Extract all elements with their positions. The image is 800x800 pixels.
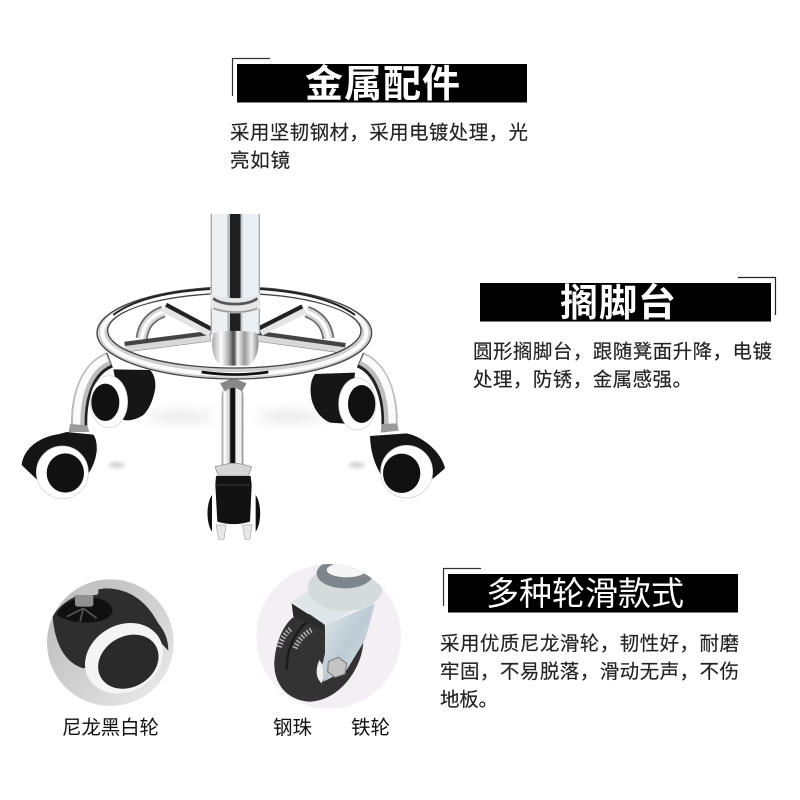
text block: metal parts description: 采用坚韧钢材，采用电镀处理，光 bbox=[230, 122, 528, 144]
text block: footrest description: 处理，防锈，金属感强。 bbox=[473, 369, 692, 391]
label: nylon wheel: 尼龙黑白轮 bbox=[62, 717, 159, 739]
text block: metal parts description: 亮如镜 bbox=[230, 150, 290, 172]
back legs bbox=[142, 312, 328, 338]
heading: metal parts bbox=[232, 58, 527, 106]
photo: nylon black and white wheel bbox=[47, 579, 176, 708]
hub bbox=[212, 331, 259, 366]
footrest ring bbox=[97, 287, 372, 379]
floor shadows bbox=[109, 411, 365, 467]
label: iron wheel: 铁轮 bbox=[351, 717, 390, 739]
front right caster bbox=[370, 423, 445, 498]
text block: footrest description bbox=[473, 341, 772, 391]
text block: wheel description: 牢固，不易脱落，滑动无声，不伤 bbox=[440, 661, 739, 683]
heading: footrest bbox=[480, 278, 776, 325]
seat pole bbox=[211, 214, 260, 334]
heading: wheel styles bbox=[444, 568, 738, 612]
text block: wheel description: 采用优质尼龙滑轮，韧性好，耐磨 bbox=[440, 633, 739, 655]
front legs bbox=[77, 358, 392, 427]
text block: footrest description: 圆形搁脚台，跟随凳面升降，电镀 bbox=[473, 341, 772, 363]
heading: wheel styles: 多种轮滑款式 bbox=[486, 575, 684, 612]
front left caster bbox=[22, 424, 97, 499]
back left caster bbox=[90, 369, 155, 428]
spokes bbox=[125, 307, 345, 350]
center leg bbox=[215, 379, 252, 476]
heading: metal parts: 金属配件 bbox=[305, 64, 460, 106]
back right caster bbox=[311, 373, 376, 430]
text block: wheel description: 地板。 bbox=[440, 689, 498, 711]
photo: steel ball iron wheel bbox=[256, 558, 401, 709]
text block: metal parts description bbox=[230, 122, 528, 172]
label: steel ball: 钢珠 bbox=[273, 717, 312, 739]
text block: wheel description bbox=[440, 633, 739, 711]
stool base photo illustration bbox=[22, 214, 445, 539]
heading: footrest: 搁脚台 bbox=[560, 283, 676, 325]
center caster bbox=[207, 476, 260, 539]
